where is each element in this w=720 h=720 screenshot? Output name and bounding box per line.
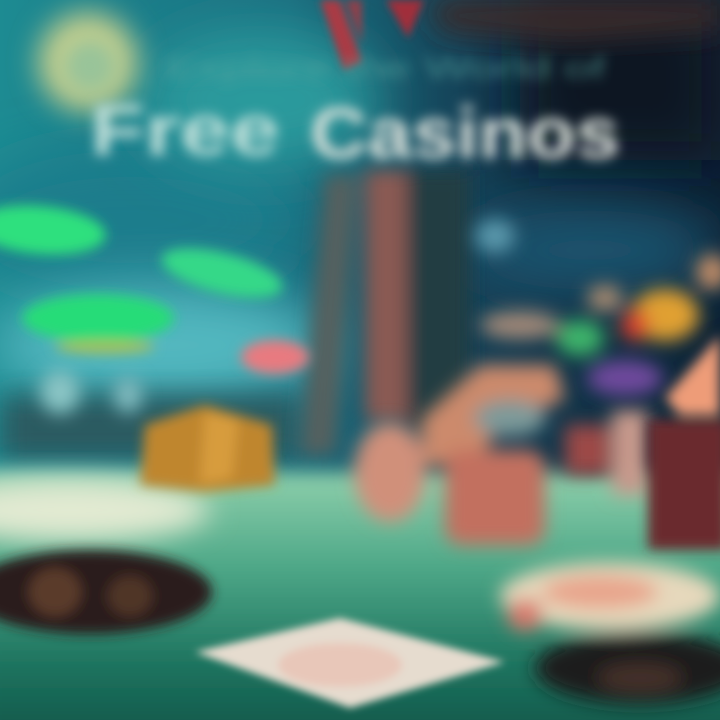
title text: Casinos [310,94,620,174]
salmon arch at right [648,335,720,550]
red ribbons at top [320,0,424,70]
title text: Explore the World of [165,52,606,85]
pale distant shapes [40,219,515,414]
dark roof beam top right [430,0,720,40]
chips and cards lower right [500,562,720,704]
title text: Free [90,91,280,171]
pink chip stacks [354,365,648,545]
pink floating chip [241,340,309,374]
moon inner disc [64,40,116,92]
green felt table [0,472,720,720]
green floating chips [0,200,287,354]
playing card on table [195,618,505,708]
moon [38,12,138,112]
central columns [300,170,470,455]
dark chips lower left [0,550,212,634]
title text [90,52,620,174]
golden chip stack [140,405,275,492]
colourful chips at right [480,254,720,396]
